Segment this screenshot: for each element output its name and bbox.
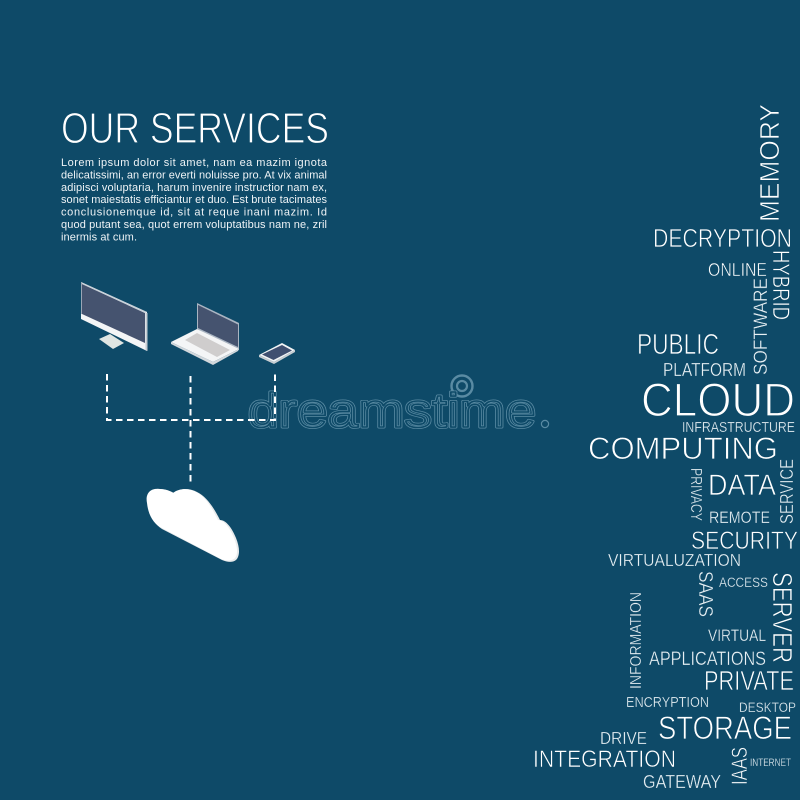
title: OUR SERVICES [61, 104, 329, 153]
word: REMOTE: REMOTE [709, 509, 770, 527]
word: MEMORY: MEMORY [754, 104, 785, 222]
word: INTEGRATION: INTEGRATION [533, 746, 676, 773]
word: PLATFORM: PLATFORM [663, 360, 746, 380]
dashed connector lines [107, 374, 275, 486]
icon: cloud [147, 489, 239, 562]
body text block: conclusionemque id, sit at reque inani mazim. Id [61, 207, 327, 219]
word: ACCESS: ACCESS [719, 574, 768, 590]
watermark: dreamstime: dreamstime [248, 385, 536, 438]
word: VIRTUALUZATION: VIRTUALUZATION [608, 550, 741, 570]
body text block: inermis at cum. [61, 231, 137, 243]
body text block: Lorem ipsum dolor sit amet, nam ea mazim ignota [61, 157, 328, 169]
watermark: dreamstime: dreamstime [248, 385, 536, 438]
word: SERVICE: SERVICE [777, 459, 797, 524]
word: GATEWAY: GATEWAY [643, 772, 721, 792]
word: DRIVE: DRIVE [600, 728, 647, 748]
body text block [61, 157, 328, 243]
word: INFORMATION: INFORMATION [628, 592, 645, 689]
word: VIRTUAL: VIRTUAL [708, 626, 766, 645]
word: PUBLIC: PUBLIC [637, 329, 719, 361]
word: DATA: DATA [708, 469, 776, 502]
word: COMPUTING: COMPUTING [588, 430, 778, 466]
word: SERVER: SERVER [767, 572, 798, 663]
icon: tablet [259, 343, 295, 364]
word: SAAS: SAAS [694, 571, 716, 617]
word: ENCRYPTION: ENCRYPTION [626, 694, 709, 711]
icon: desktop monitor [81, 282, 148, 351]
word: ONLINE: ONLINE [708, 260, 767, 280]
word: HYBRID: HYBRID [767, 250, 794, 320]
body text block: adipisci voluptaria, harum invenire instructior nam ex, [61, 182, 327, 194]
body text block: quod putant sea, quot errem voluptatibus nam ne, zril [61, 219, 327, 231]
icon: laptop [171, 303, 239, 365]
word: IAAS: IAAS [727, 747, 752, 785]
word: APPLICATIONS: APPLICATIONS [649, 649, 766, 670]
word: PRIVACY: PRIVACY [687, 468, 704, 521]
word: SOFTWARE: SOFTWARE [750, 278, 772, 375]
body text block: sonet maiestatis efficiantur et duo. Est brute tacimates [61, 194, 328, 206]
word cloud [533, 104, 798, 792]
body text block: delicatissimi, an error everti noluisse pro. At vix animal [61, 169, 327, 181]
